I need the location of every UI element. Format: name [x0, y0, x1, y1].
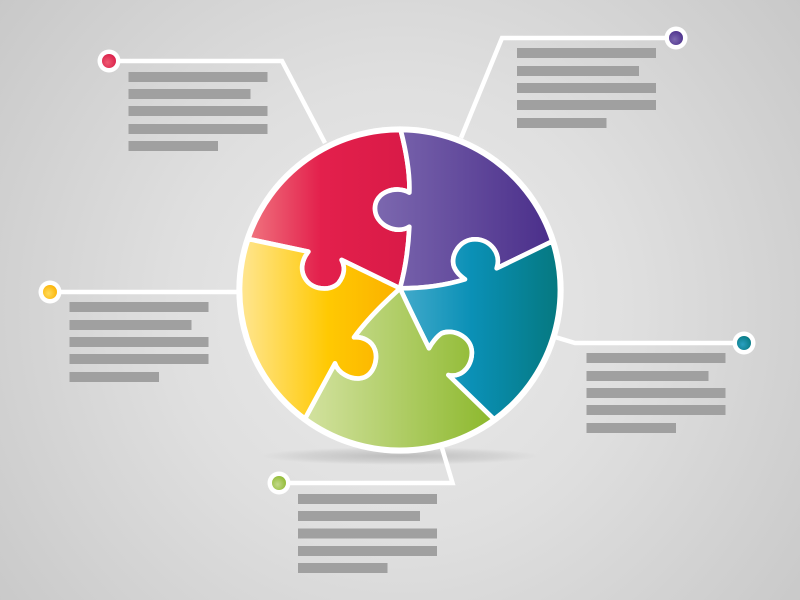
text placeholder bars: yellow [70, 302, 208, 382]
puzzle piece: purple [375, 130, 552, 288]
marker dot: teal [732, 332, 756, 354]
callout: purple [461, 26, 688, 138]
connector line: teal [555, 337, 744, 343]
callout: red [98, 50, 325, 151]
text placeholder bars: red [128, 72, 268, 151]
puzzle piece: red [248, 130, 409, 289]
puzzle piece: green [305, 288, 494, 450]
marker dot: red [98, 50, 120, 72]
marker dot: purple [664, 26, 688, 50]
connector line: yellow [50, 290, 240, 294]
marker dot: green [268, 472, 290, 494]
connector line: purple [461, 38, 676, 138]
callout: teal [555, 332, 756, 433]
connector line: green [279, 448, 452, 483]
circle ground shadow [260, 447, 540, 465]
puzzle piece: teal [400, 239, 560, 419]
white circle base [236, 126, 564, 454]
marker dot: yellow [38, 280, 62, 304]
connector line: red [109, 61, 325, 143]
text placeholder bars: green [298, 494, 437, 573]
callout: green [268, 448, 452, 573]
puzzle piece: yellow [240, 239, 400, 419]
text placeholder bars: teal [586, 353, 726, 433]
puzzle circle [236, 126, 564, 454]
callout: yellow [38, 280, 240, 382]
text placeholder bars: purple [517, 48, 656, 128]
